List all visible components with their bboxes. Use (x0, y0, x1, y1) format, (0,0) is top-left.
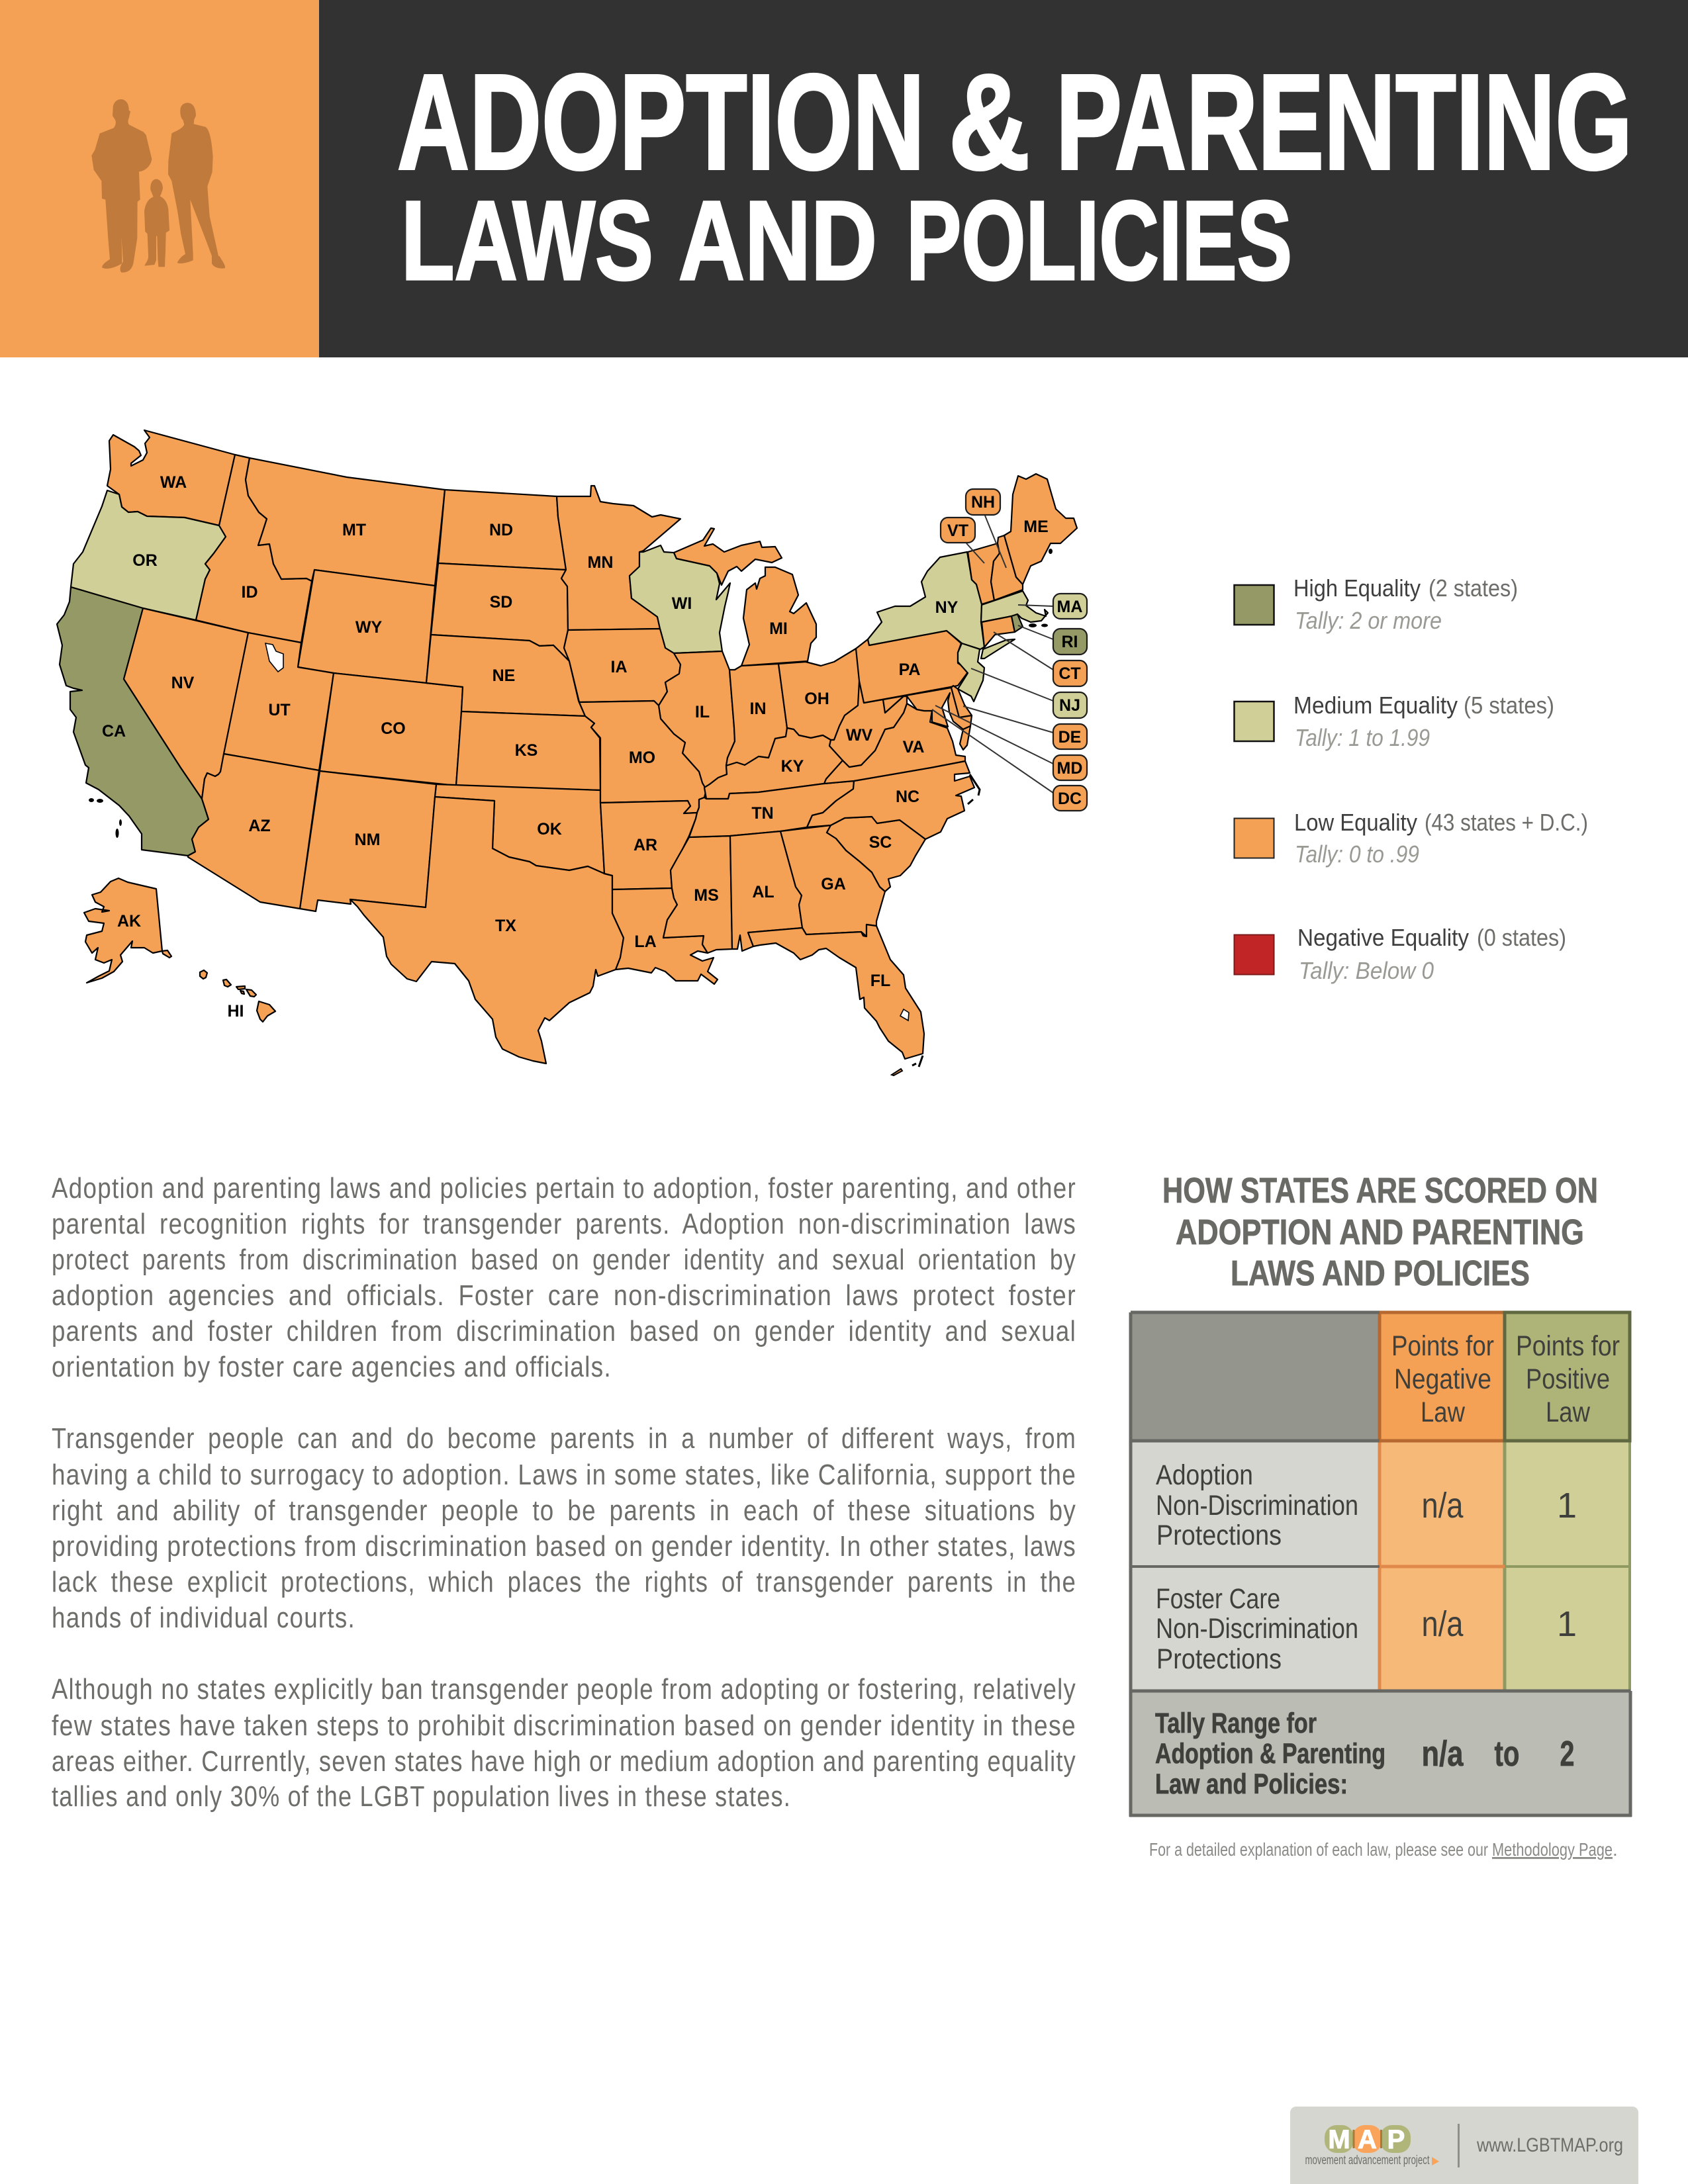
state: LA: LA (634, 933, 657, 951)
state: MN (557, 486, 680, 630)
state: CA: CA (102, 722, 126, 741)
state: NM: NM (355, 831, 380, 849)
state: AK: AK (117, 912, 141, 931)
state: NY: NY (935, 598, 959, 617)
state: SC: SC (869, 833, 892, 852)
legend item: medium equality: Tally: 1 to 1.99 (1295, 724, 1430, 751)
state: MS: MS (694, 886, 719, 905)
state: WY (298, 570, 435, 683)
state: OR (71, 490, 226, 620)
legend item: low equality: Low Equality (1294, 809, 1417, 836)
state: HI (200, 970, 275, 1022)
state: NJ (958, 643, 984, 702)
table row: adoption: Protections (1156, 1520, 1282, 1551)
state: UT: UT (268, 701, 291, 719)
title: AND (679, 178, 877, 304)
callout leader lines (932, 516, 1053, 793)
paragraph 1: parental recognition rights for transgender parents. Adoption non-discrimination laws (52, 1208, 1076, 1240)
paragraph 3: tallies and only 30% of the LGBT population lives in these states. (52, 1780, 791, 1813)
state: CT (982, 616, 1015, 647)
table header row (1131, 1312, 1630, 1441)
callout: DE (1053, 724, 1087, 749)
state: OK (435, 784, 604, 874)
state: GA (780, 825, 885, 936)
state: CO (320, 673, 463, 786)
table row: foster care: Protections (1156, 1643, 1282, 1675)
body text (52, 1172, 1076, 1813)
legend item: negative equality: (0 states) (1477, 924, 1566, 951)
callout: RI: RI (1062, 633, 1078, 651)
paragraph 1: Adoption and parenting laws and policies pertain to adoption, foster parenting, and other (52, 1172, 1076, 1205)
legend (1234, 574, 1588, 984)
state: ME (1004, 474, 1077, 584)
state: WV (829, 681, 907, 767)
callout labels for small states (941, 489, 1087, 811)
legend item: low equality: Tally: 0 to .99 (1295, 841, 1419, 868)
table row: tally range: Tally Range for (1155, 1707, 1317, 1739)
state: UT (224, 633, 334, 770)
paragraph 3: Although no states explicitly ban transgender people from adopting or fostering, relatively (52, 1673, 1076, 1706)
paragraph 2: Transgender people can and do become parents in a number of different ways, from (52, 1422, 1076, 1455)
callout: DC: DC (1058, 790, 1082, 808)
paragraph 2: having a child to surrogacy to adoption. Laws in some states, like California, support the (52, 1459, 1076, 1491)
callout: MD (1053, 755, 1087, 780)
table row: tally range: to (1495, 1734, 1520, 1774)
table row: foster care: Non-Discrimination (1156, 1613, 1358, 1645)
state: ND: ND (489, 521, 513, 539)
callout: DE: DE (1058, 728, 1081, 747)
lakes and small islands (89, 549, 1053, 1075)
state: AZ (188, 754, 319, 909)
state: WA: WA (160, 473, 187, 492)
state: IN (726, 664, 787, 766)
state: VA eastern shore (960, 726, 970, 750)
table row: tally range: n/a (1422, 1734, 1464, 1774)
legend item: medium equality: (5 states) (1464, 692, 1554, 719)
state: WV: WV (846, 726, 872, 745)
legend item: medium equality (1234, 692, 1554, 751)
table row: adoption: n/a (1422, 1486, 1464, 1525)
state: NC: NC (896, 788, 919, 806)
state: WI (630, 545, 730, 653)
state: MI lower: MI (769, 619, 788, 638)
state: ND (438, 490, 566, 570)
callout: RI (1053, 629, 1087, 655)
state: MO: MO (629, 749, 655, 767)
state: AL: AL (752, 883, 774, 901)
state: MT: MT (342, 521, 366, 539)
table row: foster care: Foster Care (1156, 1583, 1280, 1615)
table grid lines (1129, 1312, 1632, 1817)
logo: MAP: M (1328, 2125, 1350, 2154)
table header row: Negative (1394, 1363, 1491, 1395)
state: NY (868, 552, 985, 649)
legend item: negative equality: Tally: Below 0 (1299, 957, 1434, 984)
table row: foster care: 1 (1557, 1604, 1577, 1644)
legend item: high equality (1234, 574, 1518, 634)
paragraph 3: few states have taken steps to prohibit discrimination based on gender identity in these (52, 1709, 1076, 1742)
table row: tally range: Adoption & Parenting (1155, 1738, 1385, 1770)
paragraph 3 (52, 1673, 1076, 1813)
state: VT (968, 543, 1000, 604)
state: IN: IN (749, 700, 767, 718)
state: TN (689, 781, 854, 837)
state: MI lower (741, 567, 816, 666)
table footnote: . (1613, 1839, 1618, 1860)
table row: tally range (1131, 1691, 1630, 1815)
state: AZ: AZ (248, 817, 271, 835)
paragraph 1: parents and foster children from discrimination based on gender identity and sexual (52, 1315, 1076, 1347)
state: NV: NV (171, 674, 195, 692)
state: MD (883, 688, 972, 729)
state: LA (612, 888, 718, 984)
state: NY Long Island (981, 639, 1015, 659)
paragraph 2: right and ability of transgender people to be parents in each of these situations by (52, 1494, 1076, 1527)
state: ID: ID (241, 583, 258, 602)
paragraph 2: providing protections from discrimination based on gender identity. In other states, laws (52, 1530, 1076, 1563)
state: FL (748, 925, 924, 1059)
callout: MA (1053, 594, 1087, 619)
table header row: Positive (1526, 1363, 1610, 1395)
state: MA (981, 591, 1048, 622)
website URL: www.LGBTMAP.org (1476, 2134, 1623, 2156)
callout: MA: MA (1057, 598, 1082, 616)
state: OR: OR (132, 551, 158, 570)
table row: adoption (1131, 1441, 1630, 1567)
table footnote: For a detailed explanation of each law, please see our (1149, 1839, 1488, 1860)
paragraph 1 (52, 1172, 1076, 1383)
state: NC (807, 761, 974, 839)
title: & (949, 46, 1030, 198)
paragraph 1: adoption agencies and officials. Foster care non-discrimination laws protect foster (52, 1279, 1076, 1312)
callout: NH: NH (971, 493, 995, 512)
state: MT (246, 458, 445, 586)
callout: NH (966, 489, 1000, 515)
paragraph 2: hands of individual courts. (52, 1602, 355, 1634)
callout: NJ (1053, 692, 1087, 718)
state: IL (659, 651, 735, 788)
legend item: negative equality: Negative Equality (1297, 924, 1469, 951)
table header row: Points for (1516, 1330, 1620, 1362)
paragraph 1: orientation by foster care agencies and officials. (52, 1351, 612, 1383)
legend item: negative equality (1234, 924, 1566, 984)
state: AR: AR (633, 836, 657, 854)
title (397, 46, 1632, 304)
table footnote: Methodology Page (1492, 1839, 1613, 1860)
state: MN: MN (588, 553, 613, 572)
logo: MAP: movement advancement project (1305, 2154, 1430, 2167)
table row: adoption: Non-Discrimination (1156, 1490, 1358, 1522)
state: VA (824, 704, 965, 784)
state: IA: IA (610, 658, 628, 676)
callout: VT (941, 518, 975, 543)
state: TN: TN (751, 804, 774, 823)
state: GA: GA (821, 875, 846, 893)
state: NM (300, 771, 436, 911)
table row: foster care (1131, 1567, 1630, 1691)
legend item: low equality (1234, 809, 1588, 868)
state: MS (663, 836, 732, 953)
state: AK (84, 878, 171, 983)
state: NE: NE (492, 666, 515, 685)
state: NV (124, 608, 248, 799)
state: MO (579, 701, 706, 813)
logo: MAP: A (1358, 2125, 1377, 2154)
paragraph 2 (52, 1422, 1076, 1634)
scoring table (1129, 1312, 1632, 1817)
scoring table heading: ADOPTION AND PARENTING (1176, 1212, 1584, 1252)
state: SD: SD (490, 593, 512, 612)
title: POLICIES (906, 178, 1292, 304)
table header row: Law (1546, 1396, 1591, 1428)
state: WI: WI (672, 594, 692, 613)
state: PA: PA (899, 660, 920, 679)
state: KY (704, 728, 843, 799)
state: DE (951, 686, 972, 717)
callout: VT: VT (947, 522, 968, 540)
state: IL: IL (695, 703, 710, 721)
legend item: high equality: High Equality (1293, 574, 1421, 602)
callout: NJ: NJ (1059, 696, 1080, 715)
state: ID (196, 455, 312, 643)
callout: CT (1053, 660, 1087, 686)
state: AL (730, 831, 802, 951)
state: OH (778, 649, 861, 740)
header: orange icon panel (0, 0, 319, 357)
state: CO: CO (381, 719, 406, 738)
legend item: high equality: (2 states) (1429, 574, 1518, 602)
table row: adoption: Adoption (1156, 1459, 1253, 1491)
paragraph 3: areas either. Currently, seven states have high or medium adoption and parenting equality (52, 1745, 1076, 1778)
title: LAWS (401, 178, 653, 304)
table header row: Points for (1391, 1330, 1494, 1362)
state: TX (350, 797, 624, 1064)
table header row: Law (1421, 1396, 1466, 1428)
logo: MAP: P (1387, 2125, 1405, 2154)
state: NH (991, 535, 1023, 600)
legend item: medium equality: Medium Equality (1293, 692, 1458, 719)
icon: family silhouette (91, 99, 225, 273)
table row: foster care: n/a (1422, 1604, 1464, 1644)
state: AR (600, 801, 697, 889)
state: CA (57, 587, 209, 856)
paragraph 2: lack these explicit protections, which places the rights of transgender parents in the (52, 1566, 1076, 1598)
state: OK: OK (537, 820, 562, 839)
state: PA (856, 631, 969, 703)
state: WA (107, 430, 235, 525)
state: KY: KY (781, 757, 804, 776)
state: WY: WY (355, 618, 382, 637)
state: KS (456, 711, 600, 790)
header banner (0, 0, 1688, 357)
logo: MAP (1305, 2125, 1439, 2167)
map: United States equality tallies (57, 430, 1087, 1075)
state: TX: TX (495, 917, 516, 935)
state: RI (1011, 614, 1023, 632)
table row: adoption: 1 (1557, 1486, 1577, 1525)
scoring table heading (1162, 1171, 1598, 1293)
legend item: low equality: (43 states + D.C.) (1425, 809, 1588, 836)
state: VA: VA (903, 738, 924, 756)
scoring table heading: LAWS AND POLICIES (1231, 1253, 1530, 1293)
paragraph 1: protect parents from discrimination based on gender identity and sexual orientation by (52, 1244, 1076, 1276)
state: ME: ME (1023, 518, 1049, 536)
title: ADOPTION (397, 46, 925, 198)
callout: DC (1053, 786, 1087, 811)
footer MAP logo panel (1290, 2107, 1638, 2184)
callout: MD: MD (1057, 759, 1082, 778)
state: HI: HI (228, 1002, 244, 1021)
callout: CT: CT (1058, 664, 1081, 683)
table row: tally range: Law and Policies: (1155, 1768, 1348, 1800)
state: NE (426, 635, 585, 716)
state: MI upper (674, 528, 782, 585)
state: KS: KS (515, 741, 538, 760)
state: SD (431, 563, 569, 661)
state: IA (564, 629, 680, 705)
state: FL: FL (870, 972, 890, 990)
state: SC (827, 817, 925, 891)
table row: tally range: 2 (1560, 1734, 1574, 1774)
legend item: high equality: Tally: 2 or more (1295, 607, 1442, 634)
state: OH: OH (804, 690, 829, 708)
